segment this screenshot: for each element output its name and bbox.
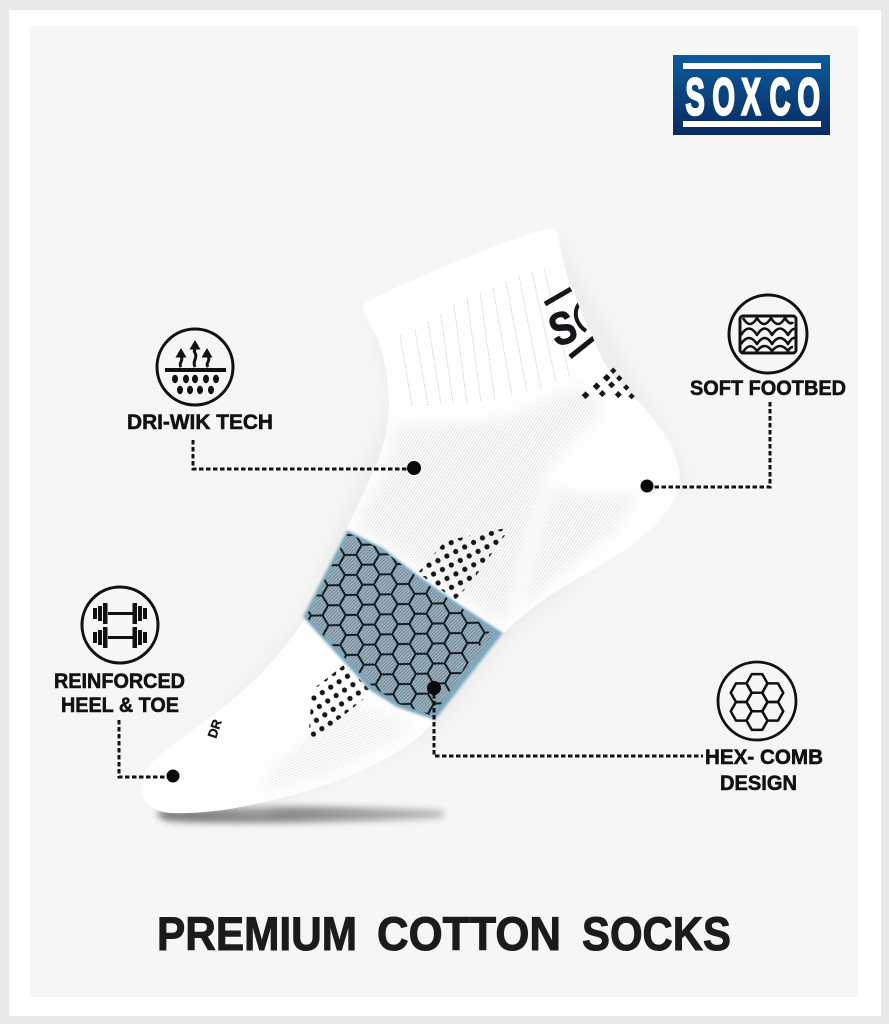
sock knit texture bbox=[264, 384, 636, 792]
connector bbox=[640, 402, 770, 492]
sock illustration bbox=[152, 268, 635, 818]
label: HEX- COMB bbox=[705, 746, 823, 769]
callout: Hex-Comb Design bbox=[427, 662, 823, 795]
title: PREMIUM bbox=[157, 908, 357, 961]
label: HEEL & TOE bbox=[61, 694, 179, 717]
connector bbox=[119, 720, 180, 782]
label bbox=[54, 670, 185, 717]
sock body bbox=[141, 228, 680, 813]
callout: Dri-Wik Tech bbox=[127, 329, 421, 475]
label: DESIGN bbox=[720, 772, 797, 795]
icon: dumbbells bbox=[82, 587, 158, 663]
title: COTTON bbox=[377, 908, 561, 961]
label bbox=[705, 746, 823, 795]
callout: Soft Footbed bbox=[640, 295, 846, 492]
label: REINFORCED bbox=[54, 670, 185, 693]
dot matrix: lower bbox=[308, 664, 372, 745]
sock logo: S bbox=[542, 300, 583, 357]
ankle dots bbox=[582, 368, 635, 399]
label: SOFT FOOTBED bbox=[690, 377, 846, 400]
icon: footbed bbox=[729, 295, 807, 373]
title bbox=[157, 908, 731, 961]
sock logo bbox=[542, 289, 595, 357]
logo: SOXCO bbox=[673, 55, 830, 135]
label: DRI-WIK TECH bbox=[127, 411, 273, 434]
hex band bbox=[303, 530, 503, 720]
connector bbox=[193, 440, 421, 475]
cuff ribbing bbox=[400, 268, 570, 405]
icon: moisture wicking bbox=[157, 329, 233, 405]
dot matrix: upper bbox=[418, 527, 511, 600]
toe text: DR bbox=[205, 717, 225, 740]
sock soft halo bbox=[150, 240, 690, 812]
sock shadow bbox=[158, 806, 444, 823]
logo: SOXCO: SOXCO bbox=[685, 68, 820, 126]
title: SOCKS bbox=[582, 908, 731, 961]
callout: Reinforced Heel & Toe bbox=[54, 587, 185, 782]
icon: honeycomb bbox=[718, 662, 796, 740]
connector bbox=[427, 681, 703, 756]
